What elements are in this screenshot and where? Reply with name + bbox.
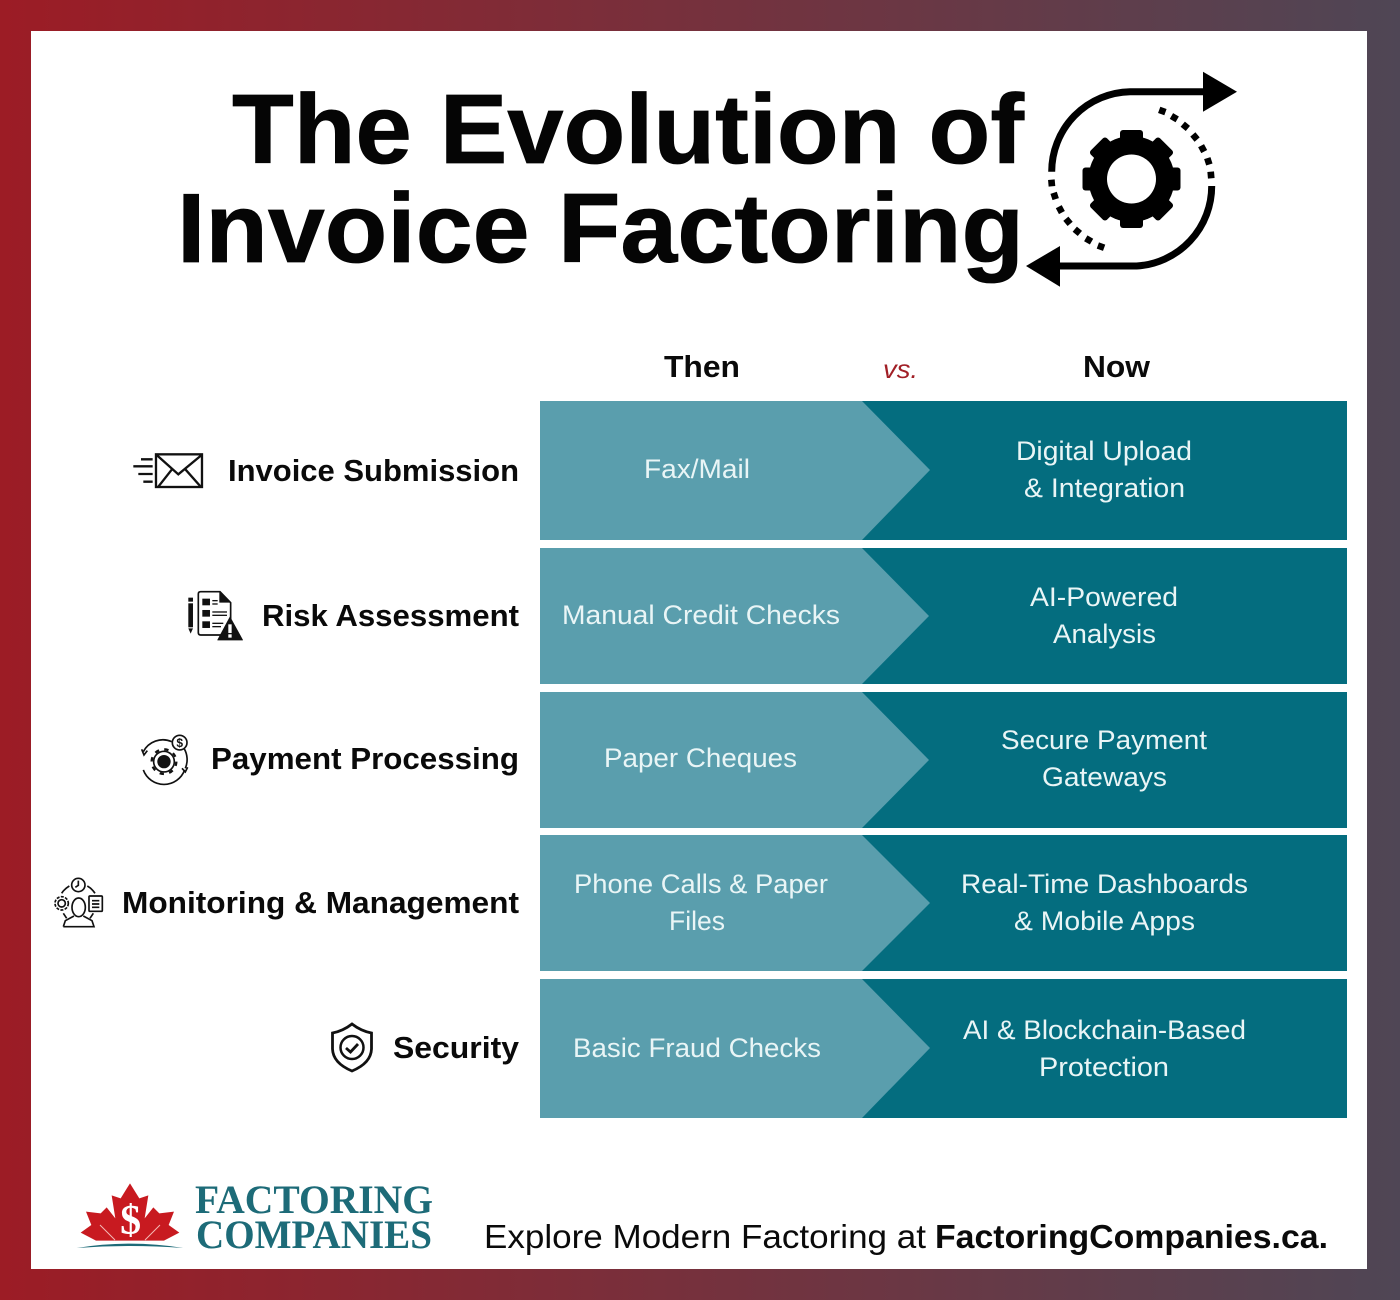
then text: [574, 869, 828, 936]
now text: Real-Time Dashboards: [961, 869, 1248, 899]
row: Security: [332, 979, 1347, 1118]
footer call to action: [484, 1218, 1328, 1255]
then cell and now cell: [540, 692, 1347, 828]
now text: & Integration: [1024, 473, 1185, 503]
icon: envelope: [133, 454, 202, 487]
row: Invoice Submission: [133, 401, 1347, 540]
now text: Secure Payment: [1001, 725, 1208, 755]
column heading: Then: Then: [664, 349, 740, 384]
now text: [961, 869, 1248, 936]
icon: maple leaf with dollar: [77, 1183, 183, 1248]
logo: Factoring Companies: [77, 1177, 433, 1257]
row: Risk Assessment: [188, 548, 1347, 684]
then cell and now cell: [540, 401, 1347, 540]
icon: maple leaf with dollar: $: [120, 1198, 141, 1244]
title: Invoice Factoring: [177, 173, 1024, 283]
icon: manager with clock, gear and clipboard: [55, 878, 102, 927]
title: [177, 74, 1024, 283]
then text: Basic Fraud Checks: [573, 1033, 821, 1063]
wordmark: FACTORING: [195, 1177, 433, 1222]
now text: Analysis: [1053, 619, 1156, 649]
then text: Files: [669, 906, 725, 936]
now text: Protection: [1039, 1052, 1169, 1082]
icon: checklist with warning: [188, 592, 243, 640]
label: Invoice Submission: Invoice Submission: [228, 453, 519, 488]
then cell and now cell: [540, 548, 1347, 684]
icon: gear with dollar coin: [142, 735, 188, 784]
column heading: Now: Now: [1083, 349, 1151, 384]
now text: [1016, 436, 1192, 503]
now text: Gateways: [1042, 762, 1167, 792]
now text: [1030, 582, 1178, 649]
row: Monitoring & Management: [55, 835, 1347, 971]
label: Risk Assessment: Risk Assessment: [262, 598, 519, 633]
footer call to action: Explore Modern Factoring at: [484, 1218, 926, 1255]
label: Security: Security: [393, 1030, 520, 1065]
label: Payment Processing: Payment Processing: [211, 741, 519, 776]
now text: [1001, 725, 1208, 792]
then cell and now cell: [540, 835, 1347, 971]
then text: Phone Calls & Paper: [574, 869, 828, 899]
now text: Digital Upload: [1016, 436, 1192, 466]
row: Payment Processing: [142, 692, 1347, 828]
now text: AI & Blockchain-Based: [963, 1015, 1246, 1045]
then text: Fax/Mail: [644, 454, 750, 484]
then text: Paper Cheques: [604, 743, 797, 773]
title: The Evolution of: [232, 74, 1024, 184]
now text: & Mobile Apps: [1014, 906, 1195, 936]
then cell and now cell: [540, 979, 1347, 1118]
now text: AI-Powered: [1030, 582, 1178, 612]
icon: gear with circular arrows: [1026, 72, 1237, 287]
footer call to action: FactoringCompanies.ca.: [935, 1218, 1328, 1255]
wordmark: [195, 1177, 433, 1257]
then text: Manual Credit Checks: [562, 600, 840, 630]
wordmark: COMPANIES: [196, 1212, 432, 1257]
column separator: vs.: vs.: [883, 354, 918, 384]
now text: [963, 1015, 1246, 1082]
icon: gear with dollar coin: $: [176, 736, 183, 750]
label: Monitoring & Management: Monitoring & Management: [122, 885, 519, 920]
icon: shield with check: [332, 1024, 372, 1071]
